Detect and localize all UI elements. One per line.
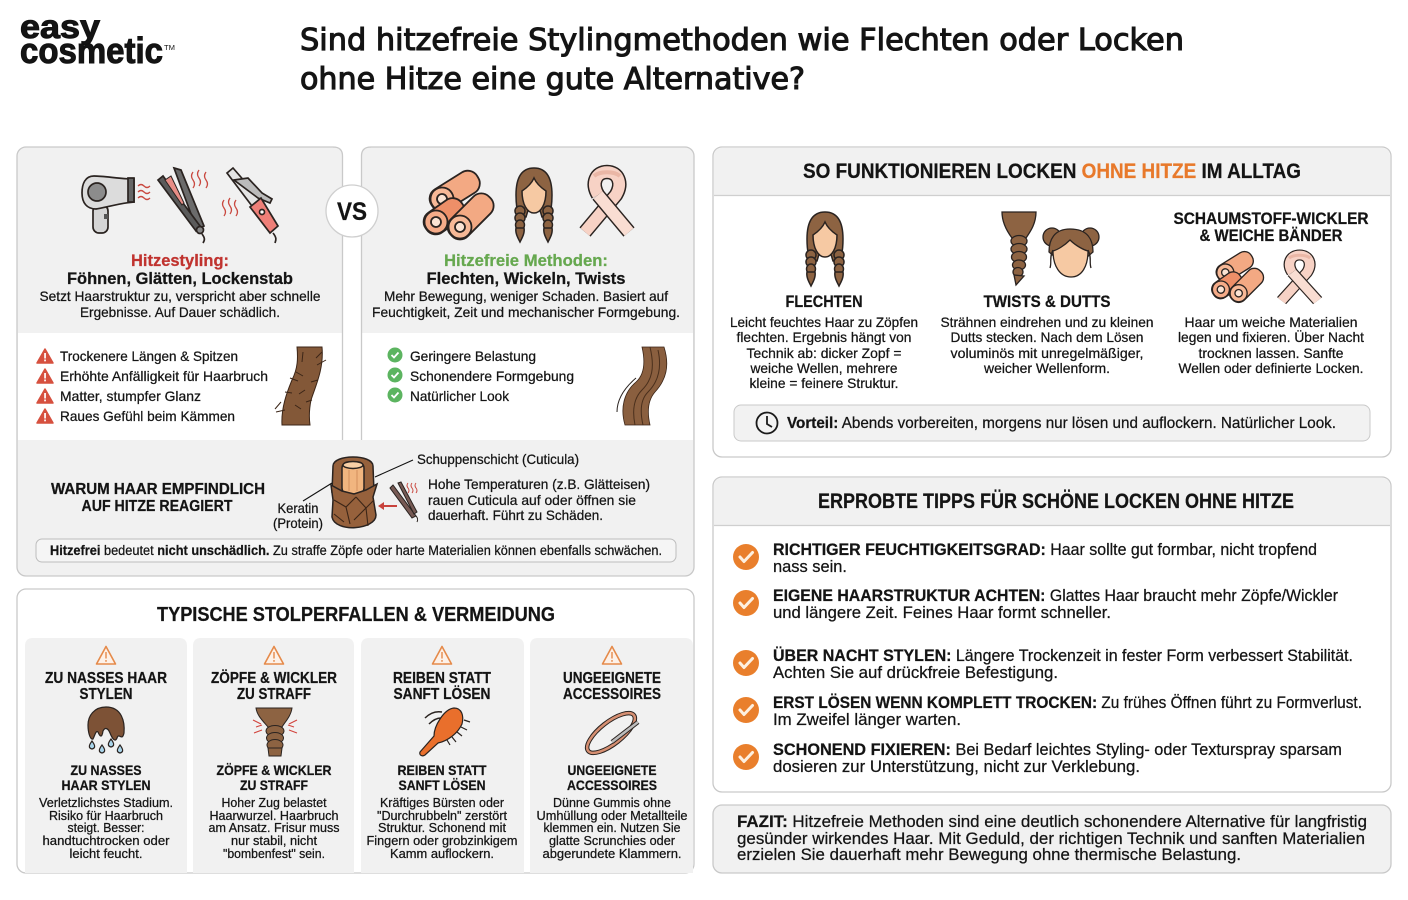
VS badge [326, 185, 378, 237]
heading: Hitzestyling [40, 251, 321, 320]
icon: clock [756, 412, 778, 434]
panel: Fazit: gesünder wirkendes Haar. Mit Geduld, der richtigen Technik und sanften Materialien [737, 829, 1365, 848]
heading: Hitzefreie Methoden: Hitzefreie Methoden: [444, 251, 608, 270]
column: Twists and Dutts [940, 212, 1154, 376]
card: Accessoires: Umhüllung oder Metallteile [536, 809, 688, 823]
list: heat-free benefits [388, 348, 574, 404]
tip 5: dosieren zur Unterstützung, nicht zur Verklebung. [773, 758, 1140, 776]
tip 1 [733, 541, 1317, 576]
icon: heat tools [82, 168, 278, 243]
title: Sind hitzefreie Stylingmethoden wie Flechten oder Locken [300, 23, 1184, 58]
diagram: hair cuticle [303, 457, 418, 528]
card: Zöpfe zu straff: ZÖPFE & WICKLER [211, 670, 337, 687]
card: Accessoires: ACCESSOIRES [563, 686, 661, 703]
heading: why hair reacts to heat: AUF HITZE REAGIERT [82, 498, 233, 515]
callout: cuticle labels: (Protein) [273, 515, 323, 531]
column: Schaumstoff-Wickler: SCHAUMSTOFF-WICKLER [1174, 209, 1368, 228]
heading: how it works: SO FUNKTIONIEREN LOCKEN OHNE HITZE IM ALLTAG [803, 160, 1301, 183]
icon: hair brush [420, 708, 470, 756]
tip 4: ERST LÖSEN WENN KOMPLETT TROCKEN: Zu frühes Öffnen führt zu Formverlust. [773, 693, 1362, 712]
icon: wet hair [88, 707, 124, 753]
list: heat damage: Erhöhte Anfälligkeit für Haarbruch [60, 368, 268, 384]
card: zu nasses Haar: handtuchtrocken oder [42, 834, 170, 848]
card: Zöpfe zu straff: nur stabil, nicht [231, 834, 318, 848]
tip 1: RICHTIGER FEUCHTIGKEITSGRAD: Haar sollte gut formbar, nicht tropfend [773, 541, 1317, 559]
list: heat-free benefits: Schonendere Formgebung [410, 368, 574, 384]
callout: cuticle labels: dauerhaft. Führt zu Schäden. [428, 507, 603, 523]
tip 3: Achten Sie auf drückfreie Befestigung. [773, 664, 1058, 682]
panel: Fazit [713, 805, 1391, 873]
title: ohne Hitze eine gute Alternative? [300, 62, 805, 97]
card: zu nasses Haar: leicht feucht. [70, 847, 142, 861]
column: Schaumstoff-Wickler [1174, 209, 1368, 376]
callout: Hitzefrei note: Hitzefrei bedeutet nicht unschädlich. Zu straffe Zöpfe oder harte Materialien können ebenfalls schwächen. [50, 543, 662, 558]
callout: cuticle labels: Hohe Temperaturen (z.B. Glätteisen) [428, 476, 650, 492]
card: zu nasses Haar [25, 638, 187, 873]
panel: pitfalls [17, 589, 694, 873]
logo: easy cosmetic: cosmetic [20, 30, 163, 71]
card: Reiben: SANFT LÖSEN [394, 686, 490, 703]
heading: tips: ERPROBTE TIPPS FÜR SCHÖNE LOCKEN OHNE HITZE [818, 490, 1294, 513]
list: heat damage: Trockenere Längen & Spitzen [60, 348, 238, 364]
icon: twist and buns [1002, 212, 1099, 285]
list: heat damage: Matter, stumpfer Glanz [60, 388, 201, 404]
icon: curling iron [227, 168, 278, 243]
icon: tight braid [253, 708, 297, 756]
card: Zöpfe zu straff: am Ansatz. Frisur muss [208, 821, 340, 835]
card: Accessoires: ACCESSOIRES [567, 777, 657, 793]
icon: hair band and clip [581, 706, 641, 760]
heading: pitfalls: TYPISCHE STOLPERFALLEN & VERMEIDUNG [157, 604, 555, 626]
column: Flechten [730, 212, 918, 391]
card: Reiben: REIBEN STATT [398, 762, 487, 778]
VS badge: VS [337, 198, 367, 226]
tip 2: und längere Zeit. Feines Haar formt schneller. [773, 604, 1111, 622]
card: Zöpfe zu straff: "bombenfest" sein. [223, 847, 325, 861]
tip 3: ÜBER NACHT STYLEN: Längere Trockenzeit in fester Form verbessert Stabilität. [773, 646, 1353, 665]
card: Reiben [361, 638, 524, 873]
card: Reiben: SANFT LÖSEN [398, 777, 486, 793]
card: Accessoires: abgerundete Klammern. [542, 847, 682, 861]
list: heat damage: Raues Gefühl beim Kämmen [60, 408, 235, 424]
card: Zöpfe zu straff: ZÖPFE & WICKLER [216, 762, 332, 778]
card: zu nasses Haar: Verletzlichstes Stadium. [39, 796, 173, 810]
column: Schaumstoff-Wickler: Wellen oder definierte Locken. [1178, 360, 1364, 376]
tip 4: Im Zweifel länger warten. [773, 711, 961, 729]
card: Reiben: Struktur. Schonend mit [378, 821, 507, 835]
tip 4 [733, 693, 1362, 729]
column: Twists and Dutts: weicher Wellenform. [983, 360, 1110, 376]
card: zu nasses Haar: ZU NASSES [70, 762, 142, 778]
panel: comparison and heat sensitivity [17, 144, 694, 576]
panel: Fazit: erzielen Sie dauerhaft mehr Bewegung ohne thermische Belastung. [737, 845, 1241, 864]
card: zu nasses Haar: STYLEN [80, 686, 132, 703]
card: Zöpfe zu straff: Hoher Zug belastet [222, 796, 327, 810]
title [300, 23, 1184, 97]
column: Flechten: Technik ab: dicker Zopf = [746, 345, 902, 361]
card: Reiben: "Durchrubbeln" zerstört [377, 809, 508, 823]
tip 2 [733, 587, 1338, 622]
card: Accessoires [530, 638, 693, 873]
card: Reiben: REIBEN STATT [393, 670, 491, 687]
logo: easy cosmetic: TM [164, 45, 175, 52]
column: Flechten: flechten. Ergebnis hängt von [736, 329, 912, 345]
heading: Hitzefreie Methoden: Flechten, Wickeln, Twists [426, 269, 626, 288]
callout: cuticle labels [273, 451, 650, 531]
callout: Hitzefrei note [36, 539, 676, 562]
list: heat damage [37, 348, 268, 424]
column: Twists and Dutts: Strähnen eindrehen und zu kleinen [940, 314, 1154, 330]
column: Schaumstoff-Wickler: Haar um weiche Materialien [1184, 314, 1358, 330]
card: zu nasses Haar: HAAR STYLEN [62, 777, 150, 793]
logo: easy cosmetic: easy [20, 8, 101, 45]
panel: tips [713, 477, 1391, 792]
callout: cuticle labels: Schuppenschicht (Cuticula) [417, 451, 579, 467]
tip 2: EIGENE HAARSTRUKTUR ACHTEN: Glattes Haar braucht mehr Zöpfe/Wickler [773, 587, 1338, 605]
column: Twists and Dutts: TWISTS & DUTTS [984, 292, 1110, 311]
heading: Hitzestyling: Hitzestyling: [131, 251, 229, 270]
callout: Vorteil: Vorteil: Abends vorbereiten, morgens nur lösen und auflockern. Natürlicher Look. [787, 415, 1336, 432]
heading: Hitzefreie Methoden [372, 251, 680, 320]
icon: rollers, braids, ribbon [419, 167, 629, 244]
card: Reiben: Kamm auflockern. [390, 847, 494, 861]
column: Flechten: weiche Wellen, mehrere [750, 360, 898, 376]
heading: Hitzestyling: Ergebnisse. Auf Dauer schädlich. [80, 304, 280, 320]
card: Zöpfe zu straff [193, 638, 354, 873]
heading: Hitzefreie Methoden: Mehr Bewegung, weniger Schaden. Basiert auf [384, 288, 668, 304]
icon: flat iron [158, 168, 238, 243]
heading: Hitzestyling: Setzt Haarstruktur zu, verspricht aber schnelle [40, 288, 321, 304]
icon: damaged hair strand [275, 347, 326, 425]
card: zu nasses Haar: steigt. Besser: [68, 821, 144, 835]
card: Accessoires: klemmen ein. Nutzen Sie [544, 821, 681, 835]
tip 3 [733, 646, 1353, 682]
card: Zöpfe zu straff: Haarwurzel. Haarbruch [210, 809, 339, 823]
heading: why hair reacts to heat [51, 481, 265, 515]
column: Schaumstoff-Wickler: trocknen lassen. Sanfte [1198, 345, 1344, 361]
icon: hair dryer [82, 176, 150, 233]
tip 5 [733, 741, 1342, 776]
card: Zöpfe zu straff: ZU STRAFF [240, 777, 308, 793]
callout: cuticle labels: Keratin [278, 500, 318, 516]
heading: Hitzestyling: Föhnen, Glätten, Lockenstab [67, 269, 293, 288]
card: Accessoires: Dünne Gummis ohne [553, 796, 671, 810]
column: Flechten: kleine = feinere Struktur. [750, 375, 898, 391]
column: Flechten: Leicht feuchtes Haar zu Zöpfen [730, 314, 918, 330]
card: Reiben: Fingern oder grobzinkigem [366, 834, 518, 848]
tip 5: SCHONEND FIXIEREN: Bei Bedarf leichtes Styling- oder Texturspray sparsam [773, 741, 1342, 759]
panel: Fazit: FAZIT: Hitzefreie Methoden sind eine deutlich schonendere Alternative für langfristig [737, 812, 1367, 831]
column: Twists and Dutts: Dutts stecken. Nach dem Lösen [950, 329, 1144, 345]
list: heat-free benefits: Geringere Belastung [410, 348, 536, 364]
card: zu nasses Haar: ZU NASSES HAAR [45, 670, 167, 687]
card: Reiben: Kräftiges Bürsten oder [380, 796, 504, 810]
callout: cuticle labels: rauen Cuticula auf oder öffnen sie [428, 492, 636, 508]
list: heat-free benefits: Natürlicher Look [410, 388, 510, 404]
card: Zöpfe zu straff: ZU STRAFF [237, 686, 311, 703]
column: Schaumstoff-Wickler: & WEICHE BÄNDER [1200, 226, 1342, 245]
column: Flechten: FLECHTEN [786, 292, 862, 311]
card: Accessoires: glatte Scrunchies oder [549, 834, 675, 848]
logo: easy cosmetic [20, 8, 175, 71]
heading: why hair reacts to heat: WARUM HAAR EMPFINDLICH [51, 481, 265, 498]
tip 1: nass sein. [773, 558, 847, 576]
panel: how it works [713, 147, 1391, 457]
card: Accessoires: UNGEEIGNETE [568, 762, 656, 778]
icon: healthy hair strand [617, 347, 667, 425]
column: Twists and Dutts: voluminös mit unregelmäßiger, [950, 345, 1144, 361]
card: Accessoires: UNGEEIGNETE [563, 670, 661, 687]
callout: Vorteil [734, 405, 1370, 441]
column: Schaumstoff-Wickler: legen und fixieren. Über Nacht [1178, 328, 1364, 345]
card: zu nasses Haar: Risiko für Haarbruch [49, 809, 163, 823]
heading: Hitzefreie Methoden: Feuchtigkeit, Zeit und mechanischer Formgebung. [372, 304, 680, 320]
